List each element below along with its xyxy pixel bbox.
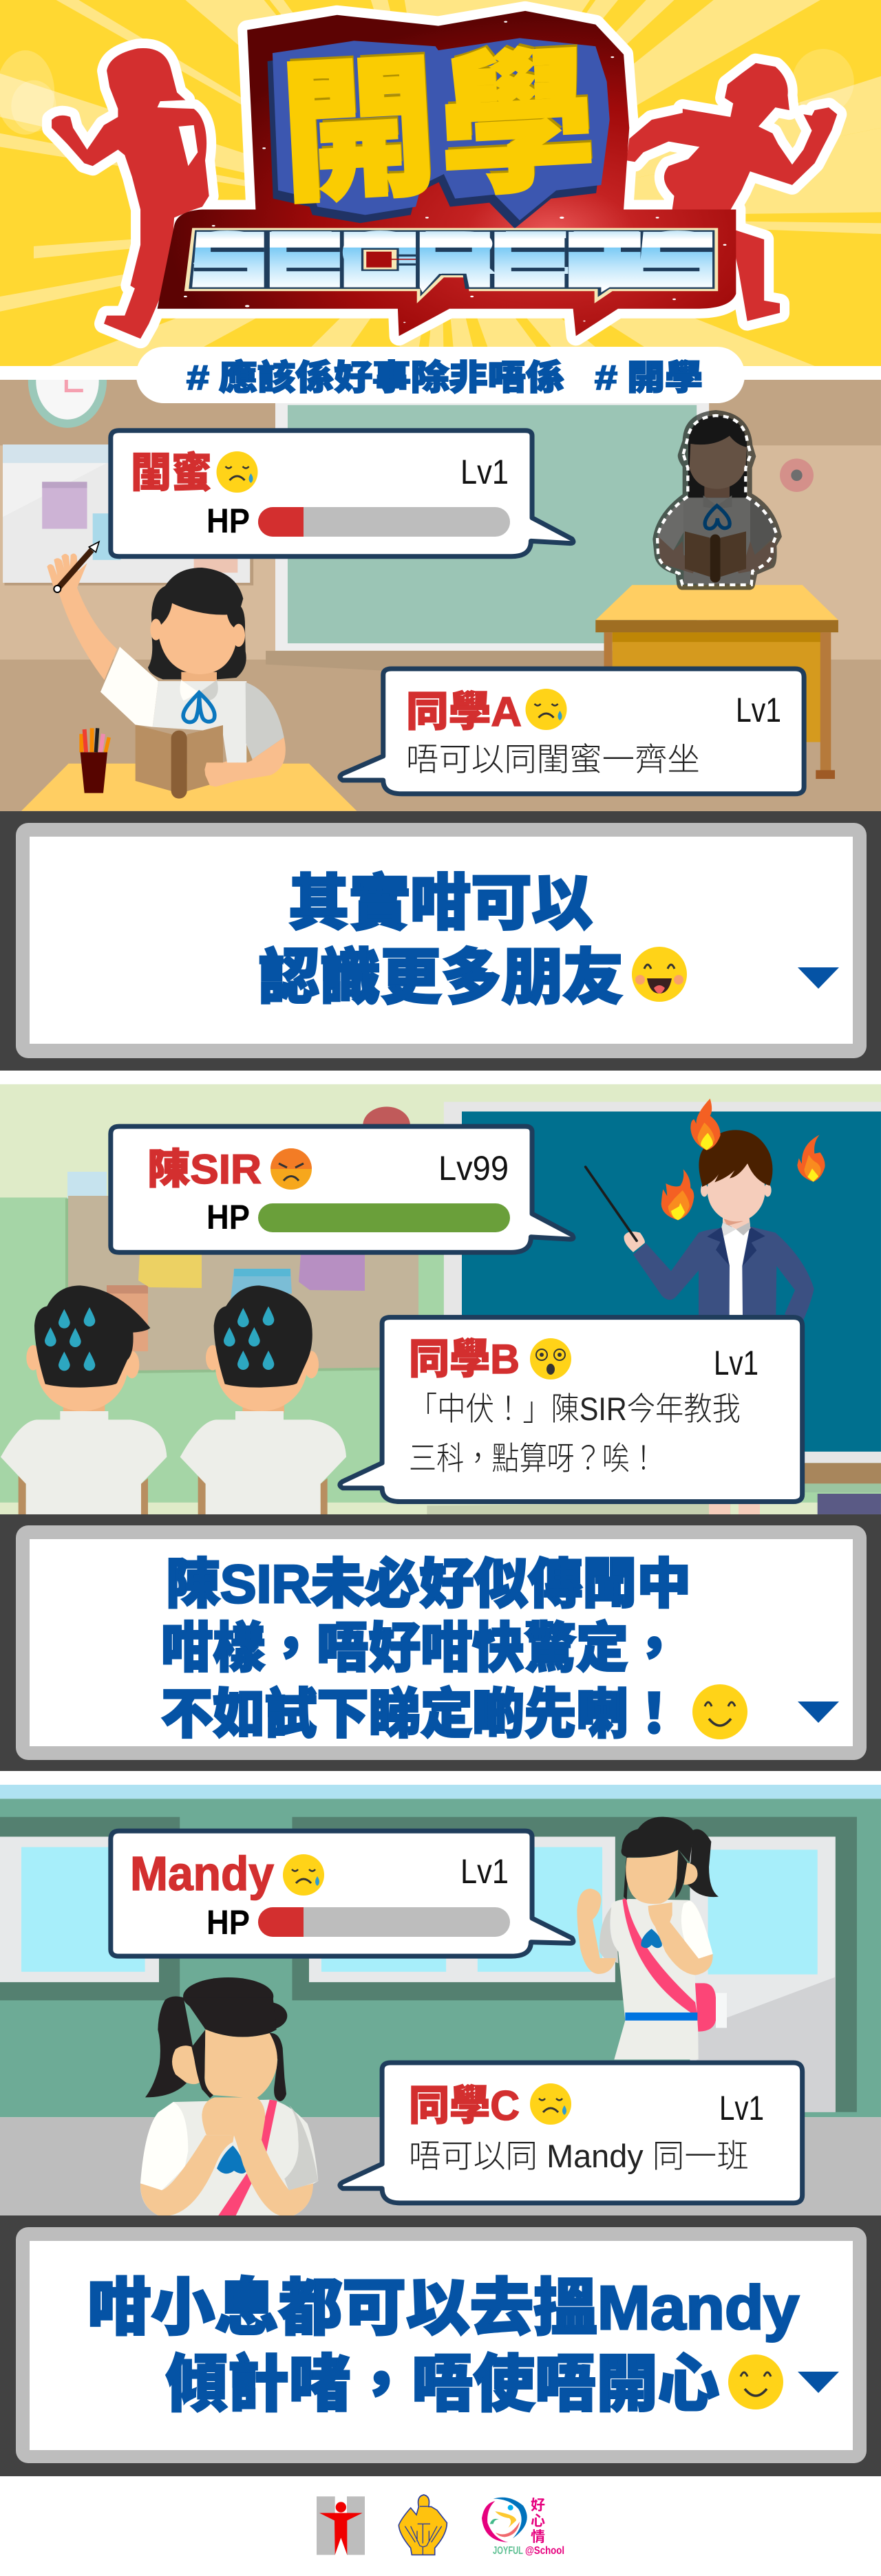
- name: 同學B: 同學B: [409, 1336, 520, 1382]
- teacher with pointer: [586, 1099, 825, 1321]
- emoji: smiling face: [692, 1684, 747, 1739]
- title: 開學 shadow: 學: [437, 32, 601, 211]
- white band under header: [0, 366, 881, 380]
- HP label: HP: [206, 1903, 250, 1942]
- student desk: [21, 764, 357, 811]
- name: 陳SIR: 陳SIR: [147, 1146, 262, 1192]
- arrow: next: [798, 1702, 839, 1723]
- wall bell: [363, 1106, 410, 1144]
- emoji: smiling face: [728, 2354, 783, 2409]
- logo text: 好心情: 心: [531, 2513, 545, 2529]
- logo text: JOYFUL@School: JOYFUL: [493, 2545, 523, 2557]
- speech text line 2: 三科，點算呀？唉！: [409, 1440, 657, 1477]
- message line 3: 不如試下睇定啲先喇！: [161, 1684, 680, 1744]
- HP bar: [258, 1907, 510, 1937]
- name: 同學C: 同學C: [409, 2083, 520, 2129]
- logo: Joyful at School: [482, 2498, 564, 2557]
- wall clock: [28, 334, 107, 428]
- scene 1: classroom: [0, 334, 881, 811]
- student with clasped hands: [140, 1977, 318, 2215]
- arrow: next: [798, 967, 839, 989]
- level: Lv1: [460, 453, 509, 491]
- bubble: 閨蜜 status: [111, 431, 573, 557]
- bubble: Mandy status: [111, 1831, 573, 1956]
- HP bar: [258, 1203, 510, 1232]
- message line 2: 咁樣，唔好咁快驚定，: [161, 1618, 680, 1678]
- message line 1: 陳SIR未必好似傳聞中: [166, 1554, 691, 1614]
- banner white outline: [158, 11, 736, 336]
- logo: hands emblem: [399, 2495, 447, 2555]
- emoji: crying face: [216, 451, 257, 493]
- teacher desk: [595, 585, 838, 779]
- HP bar: [258, 507, 510, 537]
- title: 開學 shadow: 開: [279, 39, 443, 218]
- title: SECRETS: SECRETS: [190, 219, 714, 288]
- classroom wall and floor: [0, 380, 881, 811]
- sweating student left: [1, 1285, 167, 1514]
- logo text: JOYFUL@School: @School: [525, 2545, 564, 2557]
- emoji: laughing face: [632, 947, 687, 1002]
- title: 開學: [277, 34, 599, 223]
- emoji: crying face: [526, 689, 567, 730]
- message line 1: 咁小息都可以去搵Mandy: [87, 2274, 799, 2343]
- level: Lv99: [438, 1149, 509, 1188]
- message panel 3: [0, 2215, 881, 2476]
- message line 2: 認識更多朋友: [259, 943, 624, 1011]
- galaxy backdrop: [158, 11, 736, 336]
- student raising a pencil: [47, 541, 286, 799]
- logo text: 好心情: 好: [531, 2498, 545, 2513]
- HP label: HP: [206, 502, 250, 540]
- flame 1: [690, 1099, 721, 1150]
- level: Lv1: [714, 1344, 758, 1382]
- name: 閨蜜: 閨蜜: [131, 450, 212, 496]
- corridor wall and floor: [0, 1785, 881, 2215]
- HP label: HP: [206, 1198, 250, 1236]
- title: 開學: 學: [435, 36, 599, 215]
- bubble: 同學A: [340, 669, 804, 794]
- notice board: [3, 444, 253, 586]
- footer logos: [317, 2495, 564, 2557]
- blackboard: [266, 376, 709, 671]
- left running silhouette: [52, 48, 209, 339]
- arrow: next: [798, 2372, 839, 2393]
- flame 2: [661, 1169, 694, 1220]
- flame 3: [797, 1135, 825, 1182]
- bubble: 同學C: [340, 2063, 803, 2203]
- logo text: JOYFUL@School: [493, 2545, 564, 2557]
- emoji: crying face: [530, 2083, 571, 2125]
- speech text: 唔可以同 Mandy 同一班: [409, 2138, 749, 2174]
- name: Mandy: Mandy: [130, 1847, 274, 1900]
- hashtag text: #: [187, 358, 209, 397]
- level: Lv1: [460, 1852, 509, 1891]
- cork board with notes: [65, 1172, 418, 1374]
- header sunburst background: [0, 0, 881, 366]
- corridor windows: [0, 1817, 857, 2112]
- bubble: 陳SIR status: [111, 1126, 573, 1252]
- scene 3: corridor: [0, 1785, 881, 2215]
- hashtag text: [187, 358, 703, 397]
- title: 開學 shadow: [279, 31, 601, 219]
- right running silhouette: [626, 63, 837, 321]
- emoji: crying face: [283, 1854, 324, 1896]
- hashtag pill: [136, 347, 745, 403]
- scene 2: angry teacher: [0, 1084, 881, 1514]
- speech text line 1: 「中伏！」陳SIR今年教我: [409, 1391, 741, 1427]
- sweating student right: [180, 1285, 346, 1514]
- name: 同學A: 同學A: [406, 689, 522, 735]
- message line 1: 其實咁可以: [288, 869, 593, 937]
- title banner: [158, 11, 736, 336]
- blackboard: [444, 1102, 881, 1514]
- logo text: 好心情: 情: [531, 2529, 545, 2545]
- level: Lv1: [736, 691, 781, 729]
- logo: grey H with red figure: [317, 2496, 365, 2555]
- message line 2: 傾計啫，唔使唔開心: [166, 2350, 719, 2419]
- hashtag text: 應該係好事除非唔係: [219, 358, 564, 397]
- ghost classmate with dashed outline: [652, 410, 782, 590]
- wall: [0, 1084, 881, 1514]
- speech text: 唔可以同閨蜜一齊坐: [406, 741, 700, 777]
- hashtag text: #: [595, 358, 617, 397]
- pencil cup: [81, 728, 109, 793]
- emoji: angry face: [270, 1148, 312, 1190]
- wall bell: [780, 459, 814, 492]
- student walking away: [577, 1817, 727, 2059]
- hashtag text: 開學: [627, 358, 703, 397]
- title: 開學: 開: [277, 43, 441, 222]
- title: SECRETS: [184, 219, 718, 303]
- bubble: 同學B: [340, 1318, 803, 1501]
- message panel 1: [0, 811, 881, 1071]
- teacher legs: [709, 1493, 760, 1514]
- emoji: dizzy face: [530, 1338, 571, 1380]
- message panel 2: [0, 1514, 881, 1771]
- level: Lv1: [719, 2089, 764, 2127]
- logo text: 好心情: [531, 2498, 545, 2545]
